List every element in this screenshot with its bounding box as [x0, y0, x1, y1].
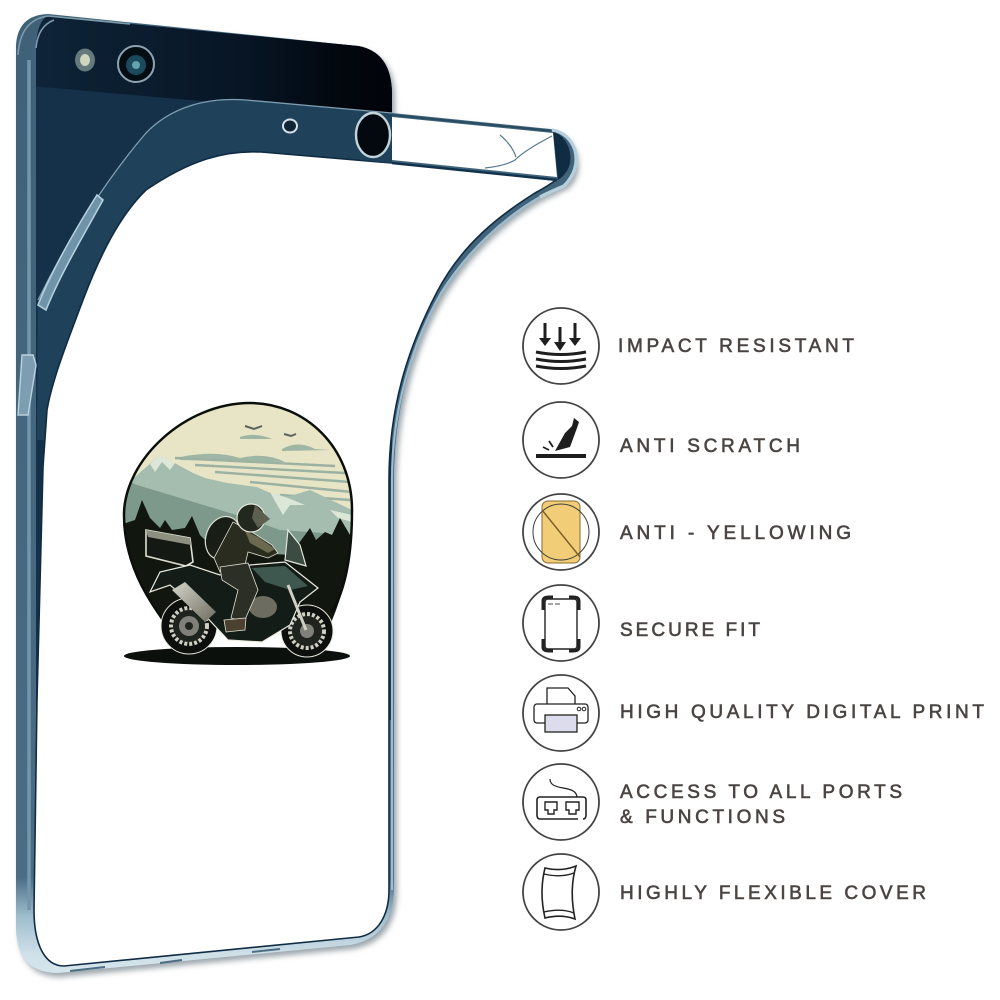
icon: phone with corner bumpers — [523, 585, 599, 661]
curled tip dark interior — [553, 131, 570, 180]
icon: blade scratching a surface — [523, 402, 599, 478]
icon: impact arrows — [523, 308, 599, 384]
label: secure fit: SECURE FIT — [620, 620, 760, 641]
ground shadow — [124, 647, 350, 665]
motorcycle illustration — [120, 400, 360, 665]
rider arm — [245, 531, 275, 553]
band top line — [392, 115, 553, 131]
rider boot — [224, 618, 246, 632]
label: anti scratch: ANTI SCRATCH — [620, 436, 800, 457]
band bottom line — [392, 163, 557, 180]
top case — [146, 530, 193, 566]
rider helmet — [237, 504, 270, 532]
fuel tank — [252, 566, 308, 590]
feature: anti yellowing — [523, 494, 851, 570]
case silhouette and rim — [16, 14, 576, 973]
snow caps — [150, 455, 352, 522]
round scene — [123, 404, 351, 622]
rider torso — [214, 522, 278, 572]
clouds — [180, 435, 330, 462]
rear camera — [118, 46, 154, 82]
left rim light stripe — [27, 60, 31, 910]
label: impact resistant: IMPACT RESISTANT — [618, 336, 854, 357]
icon: bent sheet — [523, 854, 599, 930]
forest ground — [123, 500, 350, 622]
near mountains — [125, 483, 340, 621]
fork — [288, 585, 306, 630]
dark section of band at the camera hole — [360, 112, 392, 163]
feature: secure fit — [523, 585, 760, 661]
phone in clear case — [16, 10, 579, 977]
bottom rim details — [70, 949, 280, 971]
feature: anti scratch — [523, 402, 800, 478]
feature: highly flexible cover — [523, 854, 926, 930]
windscreen — [285, 530, 306, 566]
rider leg — [220, 563, 258, 622]
icon: yellowed case with slash — [523, 494, 599, 570]
side button moulding — [38, 195, 103, 310]
lower side button moulding — [18, 355, 36, 415]
far mountains — [132, 455, 351, 621]
rear wheel — [161, 598, 217, 654]
microphone hole in case — [283, 120, 297, 132]
label: access to all ports and functions: ACCESS TO ALL PORTS — [620, 782, 902, 803]
label: highly flexible cover: HIGHLY FLEXIBLE COVER — [620, 883, 926, 904]
case top band — [37, 100, 392, 440]
phone back glass — [30, 10, 395, 730]
label: access to all ports and functions: & FUNCTIONS — [620, 807, 785, 828]
feature list — [523, 308, 984, 930]
bike body — [150, 562, 318, 642]
frame top highlight — [18, 16, 130, 55]
label: access to all ports and functions — [620, 782, 902, 828]
feature: access to ports — [523, 764, 902, 840]
label: high quality digital print: HIGH QUALITY DIGITAL PRINT — [620, 702, 984, 723]
scene outline — [124, 403, 352, 622]
rider backpack — [200, 512, 246, 564]
exhaust — [172, 582, 216, 622]
camera cut-out in case — [356, 113, 390, 157]
crease inside the curled tip — [485, 135, 552, 168]
curled tip highlight — [540, 130, 576, 197]
feature: impact resistant — [523, 308, 854, 384]
front wheel — [281, 605, 333, 657]
case drop shadow — [19, 18, 579, 977]
flash — [75, 48, 95, 72]
icon: ports with cable — [523, 764, 599, 840]
right rim highlight — [392, 197, 540, 890]
label: anti yellowing: ANTI - YELLOWING — [620, 523, 851, 544]
cloud streaks — [175, 458, 352, 500]
icon: printer — [523, 675, 599, 751]
band window — [392, 117, 557, 177]
engine — [249, 596, 277, 618]
feature: high quality digital print — [523, 675, 984, 751]
case interior (white) — [34, 152, 556, 966]
birds — [245, 426, 296, 436]
band top edge highlight — [38, 100, 392, 300]
